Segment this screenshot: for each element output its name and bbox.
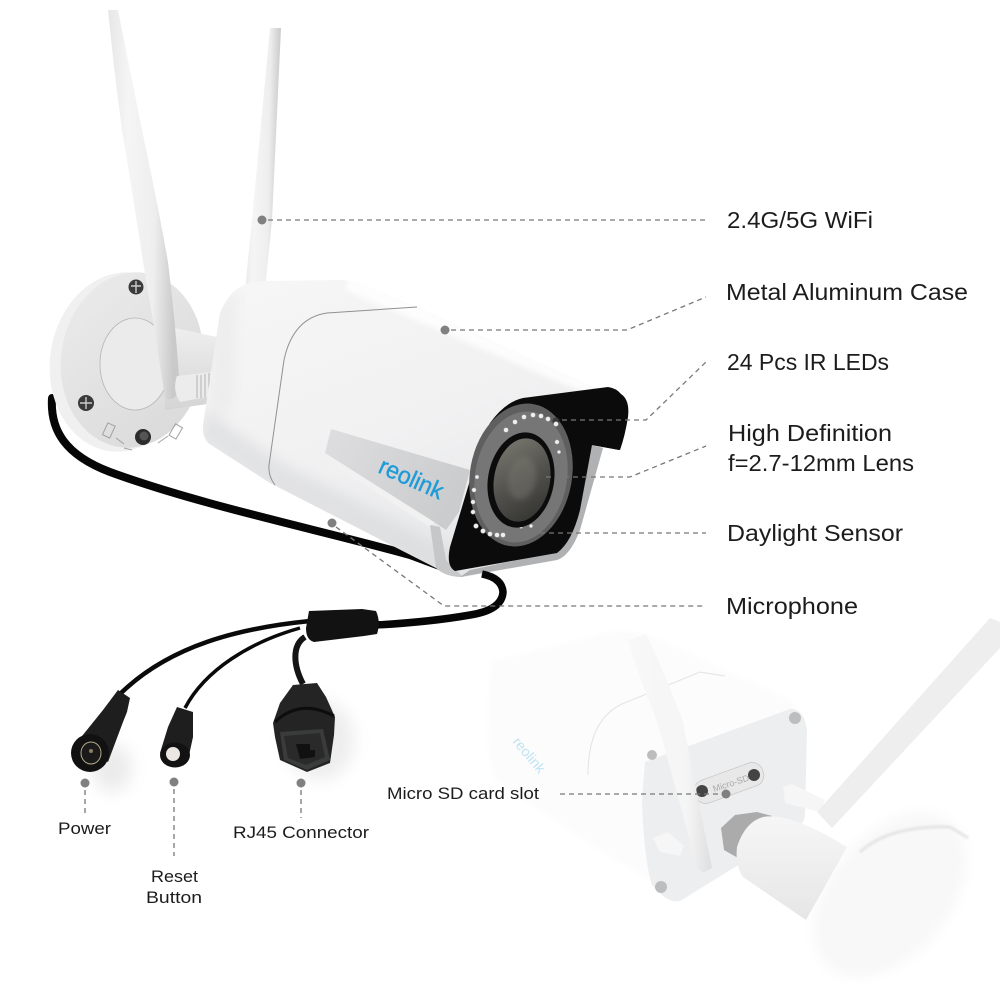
- label: RJ45 Connector: RJ45 Connector: [233, 823, 369, 842]
- leader: microphone: [328, 518, 706, 606]
- leader: RJ45: [296, 778, 306, 818]
- body shading: [200, 275, 600, 580]
- label: Reset Button: [146, 867, 202, 907]
- RJ45 connector: [273, 683, 354, 780]
- reset cable: [185, 628, 300, 708]
- mount arm: [165, 326, 222, 410]
- mount dome: [100, 318, 170, 410]
- leader: lens: [546, 446, 706, 477]
- sensor: [552, 418, 560, 424]
- rear camera view (faded): [488, 618, 1000, 1000]
- label: lens: [728, 420, 914, 476]
- reset connector: [160, 707, 193, 768]
- rear logo: reolink: [510, 734, 550, 777]
- black cable upper: [52, 398, 445, 568]
- label: Micro SD: Micro SD card slot: [387, 784, 539, 803]
- label: Power: Power: [58, 819, 111, 838]
- label: Daylight Sensor: Daylight Sensor: [727, 520, 903, 546]
- wall mount: [38, 263, 222, 461]
- hood overlap: [556, 400, 619, 450]
- rear body: [488, 630, 800, 900]
- camera body: [200, 275, 612, 580]
- leader: case: [440, 297, 706, 334]
- logo: reolink: reolink: [375, 453, 449, 506]
- rear mount disc: [783, 784, 997, 1000]
- IR LED ring: [458, 395, 584, 555]
- SD cover: [691, 759, 767, 807]
- rear connector right: [783, 784, 825, 812]
- junction moulding: [306, 609, 379, 642]
- lens glass: [487, 434, 557, 526]
- network cable: [295, 637, 305, 684]
- label: lens: High Definition: [728, 420, 892, 446]
- right silver edge: [460, 445, 603, 577]
- rear mount stem ring: [721, 812, 772, 858]
- silver inset with logo recess: [325, 429, 470, 530]
- leader: micro SD: [560, 790, 730, 798]
- antenna: rear right: [245, 28, 281, 290]
- antenna connector: [175, 372, 212, 402]
- black cable lower: [376, 574, 503, 625]
- lock icons: [102, 423, 182, 450]
- antenna: front left: [108, 10, 179, 399]
- SD cover: Micro-SD: [712, 773, 751, 794]
- leader: daylight sensor: [540, 532, 706, 534]
- leader: power: [80, 778, 90, 816]
- mount screw top: [128, 280, 144, 294]
- power cable: [120, 621, 310, 694]
- label: Reset Button: Button: [146, 888, 202, 907]
- rear antenna right: [817, 618, 1000, 828]
- label: lens: f=2.7-12mm Lens: [728, 450, 914, 476]
- cable junction and branches: [120, 609, 379, 708]
- label: IR LEDs: 24 Pcs IR LEDs: [727, 349, 889, 375]
- leader: WiFi: [258, 216, 706, 224]
- rear antenna left: [628, 634, 712, 873]
- camera front face: [449, 387, 628, 571]
- rear connector left: [653, 832, 684, 856]
- rear plate: [642, 709, 807, 901]
- power connector: [71, 690, 132, 792]
- mount hole: [135, 429, 151, 445]
- body seam: [269, 307, 417, 485]
- label: Reset Button: Reset: [151, 867, 198, 886]
- rear mount stem: [737, 816, 847, 920]
- rear screw holes: [647, 712, 801, 893]
- lens barrel: [480, 427, 562, 533]
- lower silver trim: [430, 525, 463, 577]
- leader: IR LEDs: [562, 362, 706, 420]
- label: WiFi: 2.4G/5G WiFi: [727, 207, 873, 233]
- label: Metal Aluminum Case: Metal Aluminum Case: [726, 279, 968, 305]
- mount screw bottom: [78, 395, 94, 411]
- IR LEDs: [471, 413, 561, 537]
- label: Microphone: Microphone: [726, 593, 858, 619]
- leader: reset: [170, 778, 178, 856]
